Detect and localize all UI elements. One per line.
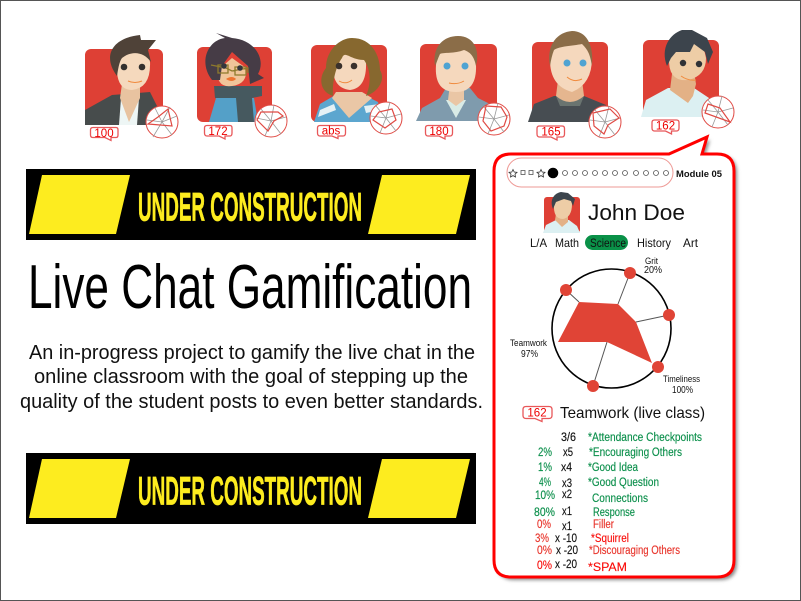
scoring table: *Squirrel bbox=[591, 533, 629, 545]
radar chart: 20% bbox=[644, 265, 662, 276]
scoring table: Response bbox=[593, 507, 635, 519]
score badge abs: abs bbox=[322, 126, 341, 138]
score badge 162 bbox=[652, 120, 679, 134]
banner: under construction top bbox=[26, 169, 476, 240]
banner: under construction top: UNDER CONSTRUCTION bbox=[138, 186, 362, 230]
score badge 172: 172 bbox=[208, 126, 228, 138]
scoring table: 0% bbox=[537, 519, 551, 531]
scoring table: 80% bbox=[534, 507, 555, 519]
section heading: Teamwork (live class) bbox=[560, 405, 705, 422]
score badge 100 bbox=[90, 128, 118, 140]
score badge 180 bbox=[426, 126, 452, 139]
student name: John Doe bbox=[588, 200, 685, 225]
panel: student detail callout bbox=[494, 137, 737, 580]
radar chart: Teamwork bbox=[510, 338, 547, 348]
description text: online classroom with the goal of stepping up the bbox=[34, 366, 468, 388]
scoring table: *SPAM bbox=[588, 560, 627, 574]
scoring table: *Good Question bbox=[588, 477, 659, 489]
radar mini 1 bbox=[146, 106, 178, 138]
subject tabs: Science bbox=[590, 236, 626, 250]
scoring table: 4% bbox=[539, 477, 551, 489]
avatar: student 5 bbox=[528, 31, 612, 122]
score badge 165: 165 bbox=[541, 126, 561, 138]
banner: under construction bottom bbox=[26, 453, 476, 524]
radar mini 2 bbox=[255, 105, 287, 137]
scoring table: x -20 bbox=[556, 545, 578, 557]
scoring table: 1% bbox=[538, 462, 552, 474]
score badge 100: 100 bbox=[94, 128, 114, 140]
scoring table: x5 bbox=[563, 447, 573, 459]
subject tabs: Math bbox=[555, 236, 579, 250]
scoring table: 2% bbox=[538, 447, 552, 459]
scoring table: 3% bbox=[535, 533, 549, 545]
banner: under construction bottom: UNDER CONSTRUCTION bbox=[138, 470, 362, 514]
radar chart bbox=[510, 256, 700, 396]
description text: quality of the student posts to even better standards. bbox=[20, 391, 483, 413]
radar chart: Grit bbox=[645, 256, 658, 266]
avatar: John Doe bbox=[543, 192, 580, 233]
title: Live Chat Gamification bbox=[28, 253, 472, 322]
scoring table: *Attendance Checkpoints bbox=[588, 432, 702, 444]
description text: An in-progress project to gamify the live chat in the bbox=[29, 342, 475, 364]
scoring table: 3/6 bbox=[561, 432, 576, 444]
radar chart: 97% bbox=[521, 349, 538, 360]
scoring table: x -10 bbox=[555, 533, 577, 545]
subject tabs: Art bbox=[683, 236, 699, 250]
scoring table: Filler bbox=[593, 519, 614, 531]
score badge 165 bbox=[537, 126, 564, 140]
scoring table bbox=[534, 432, 702, 574]
radar mini 4 bbox=[478, 103, 510, 135]
avatar: student 6 bbox=[641, 30, 719, 117]
subject tabs: L/A bbox=[530, 236, 547, 250]
radar mini 6 bbox=[702, 96, 734, 128]
subject tabs: History bbox=[637, 236, 671, 250]
radar mini 5 bbox=[589, 106, 621, 138]
score badge 180: 180 bbox=[429, 126, 449, 138]
scoring table: x4 bbox=[561, 462, 573, 474]
scoring table: x3 bbox=[562, 478, 572, 490]
scoring table: 0% bbox=[537, 545, 552, 557]
avatar: student 4 bbox=[416, 36, 497, 121]
radar chart: Timeliness bbox=[663, 374, 700, 384]
scoring table: x -20 bbox=[555, 559, 577, 571]
scoring table: *Good Idea bbox=[588, 462, 639, 474]
description text bbox=[20, 342, 483, 413]
module label: Module 05 bbox=[676, 169, 723, 180]
score badge 172 bbox=[204, 126, 232, 139]
score badge abs bbox=[318, 126, 346, 138]
scoring table: x1 bbox=[562, 506, 572, 518]
scoring table: Connections bbox=[592, 493, 648, 505]
scoring table: 10% bbox=[535, 490, 555, 502]
scoring table: *Discouraging Others bbox=[589, 545, 680, 557]
scoring table: x2 bbox=[562, 489, 572, 501]
scoring table: x1 bbox=[562, 521, 572, 533]
radar mini 3 bbox=[370, 102, 402, 134]
score badge 162 large: 162 bbox=[527, 408, 547, 420]
avatar: student 2 bbox=[197, 33, 272, 122]
score badge 162: 162 bbox=[656, 120, 675, 132]
scoring table: *Encouraging Others bbox=[589, 447, 682, 459]
scoring table: 0% bbox=[537, 560, 552, 572]
module progress pill bbox=[507, 158, 673, 187]
score badge 162 large bbox=[523, 406, 552, 422]
radar chart: 100% bbox=[672, 385, 693, 396]
subject tabs bbox=[530, 235, 699, 250]
avatar: student 1 bbox=[85, 35, 163, 125]
avatar: student 3 bbox=[311, 38, 387, 122]
